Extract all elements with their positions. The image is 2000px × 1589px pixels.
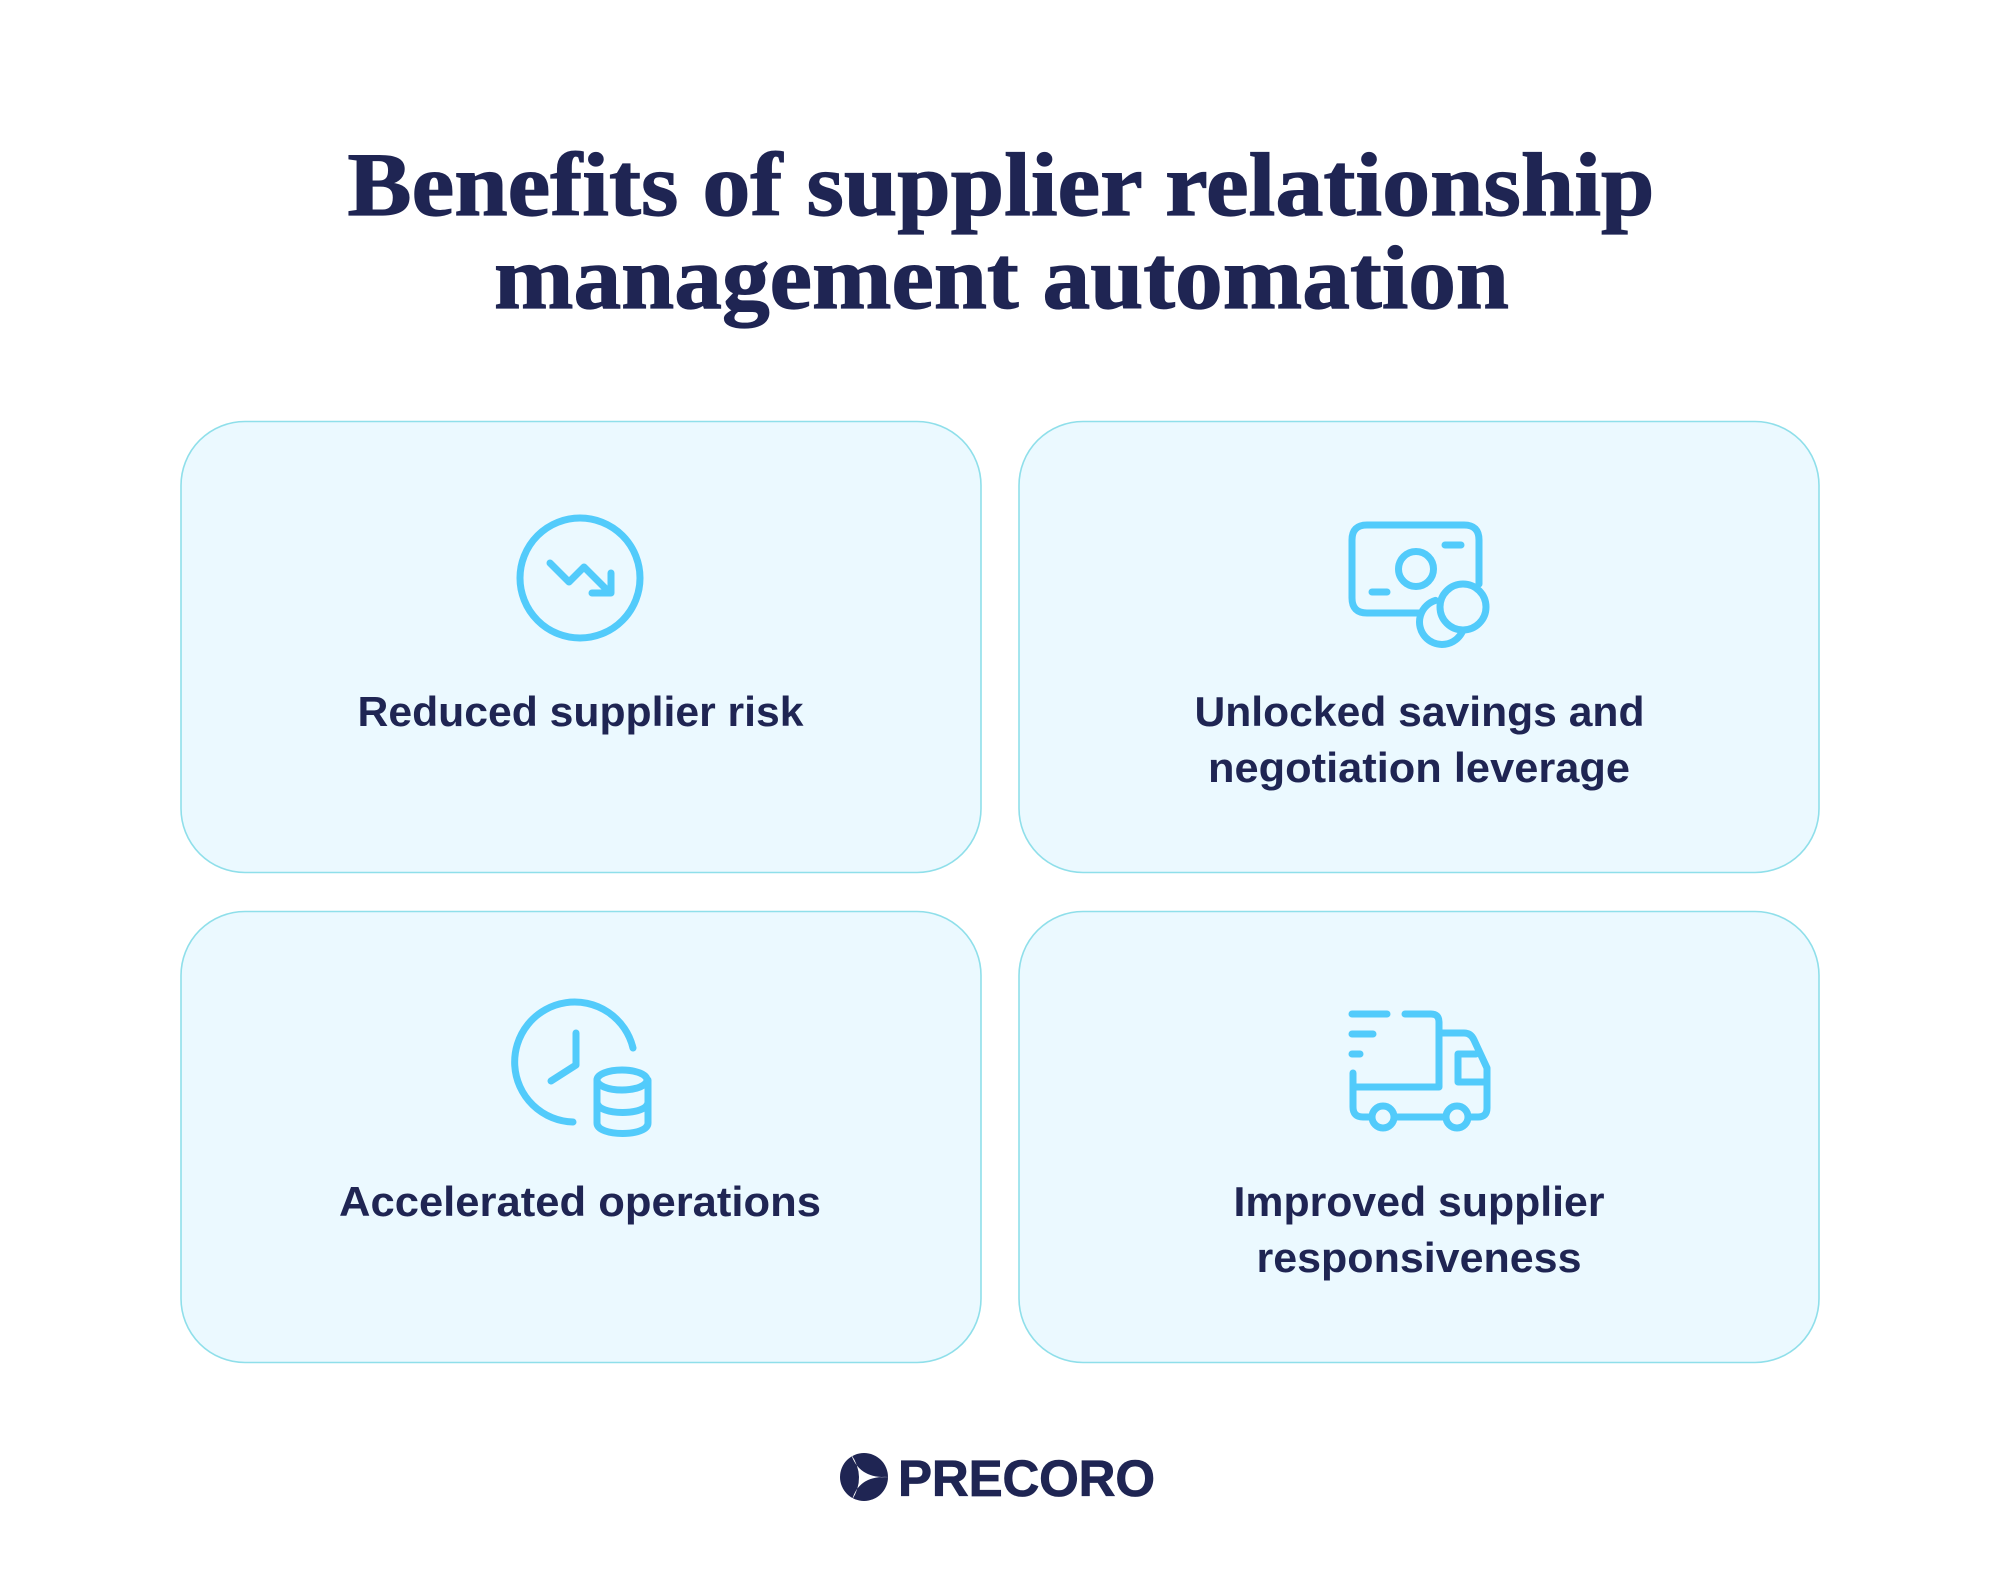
logo: precoro xyxy=(840,1450,1155,1507)
panel: unlocked savings: negotiation leverage xyxy=(1208,744,1630,791)
label: accelerated operations: Accelerated operations xyxy=(339,1178,821,1225)
label: reduced supplier risk: Reduced supplier risk xyxy=(358,688,804,735)
panel: accelerated operations xyxy=(181,912,981,1362)
label: improved responsiveness: Improved supplier xyxy=(1234,1178,1604,1225)
icon: downward trend in circle xyxy=(520,518,640,638)
wordmark: PRECORO xyxy=(898,1450,1155,1507)
icon: delivery truck xyxy=(1352,1014,1487,1128)
title: management automation xyxy=(494,229,1509,328)
icon: banknote and coins xyxy=(1352,525,1486,644)
label: unlocked savings: Unlocked savings and xyxy=(1194,688,1644,735)
panel: improved responsiveness xyxy=(1019,912,1819,1362)
panel: reduced supplier risk xyxy=(181,422,981,872)
icon: clock and database xyxy=(515,1002,648,1134)
title: Benefits of supplier relationship xyxy=(348,136,1654,235)
panel: unlocked savings xyxy=(1019,422,1819,872)
panel: improved responsiveness: responsiveness xyxy=(1256,1234,1582,1281)
title xyxy=(348,136,1654,328)
icon: precoro mark xyxy=(840,1453,889,1501)
